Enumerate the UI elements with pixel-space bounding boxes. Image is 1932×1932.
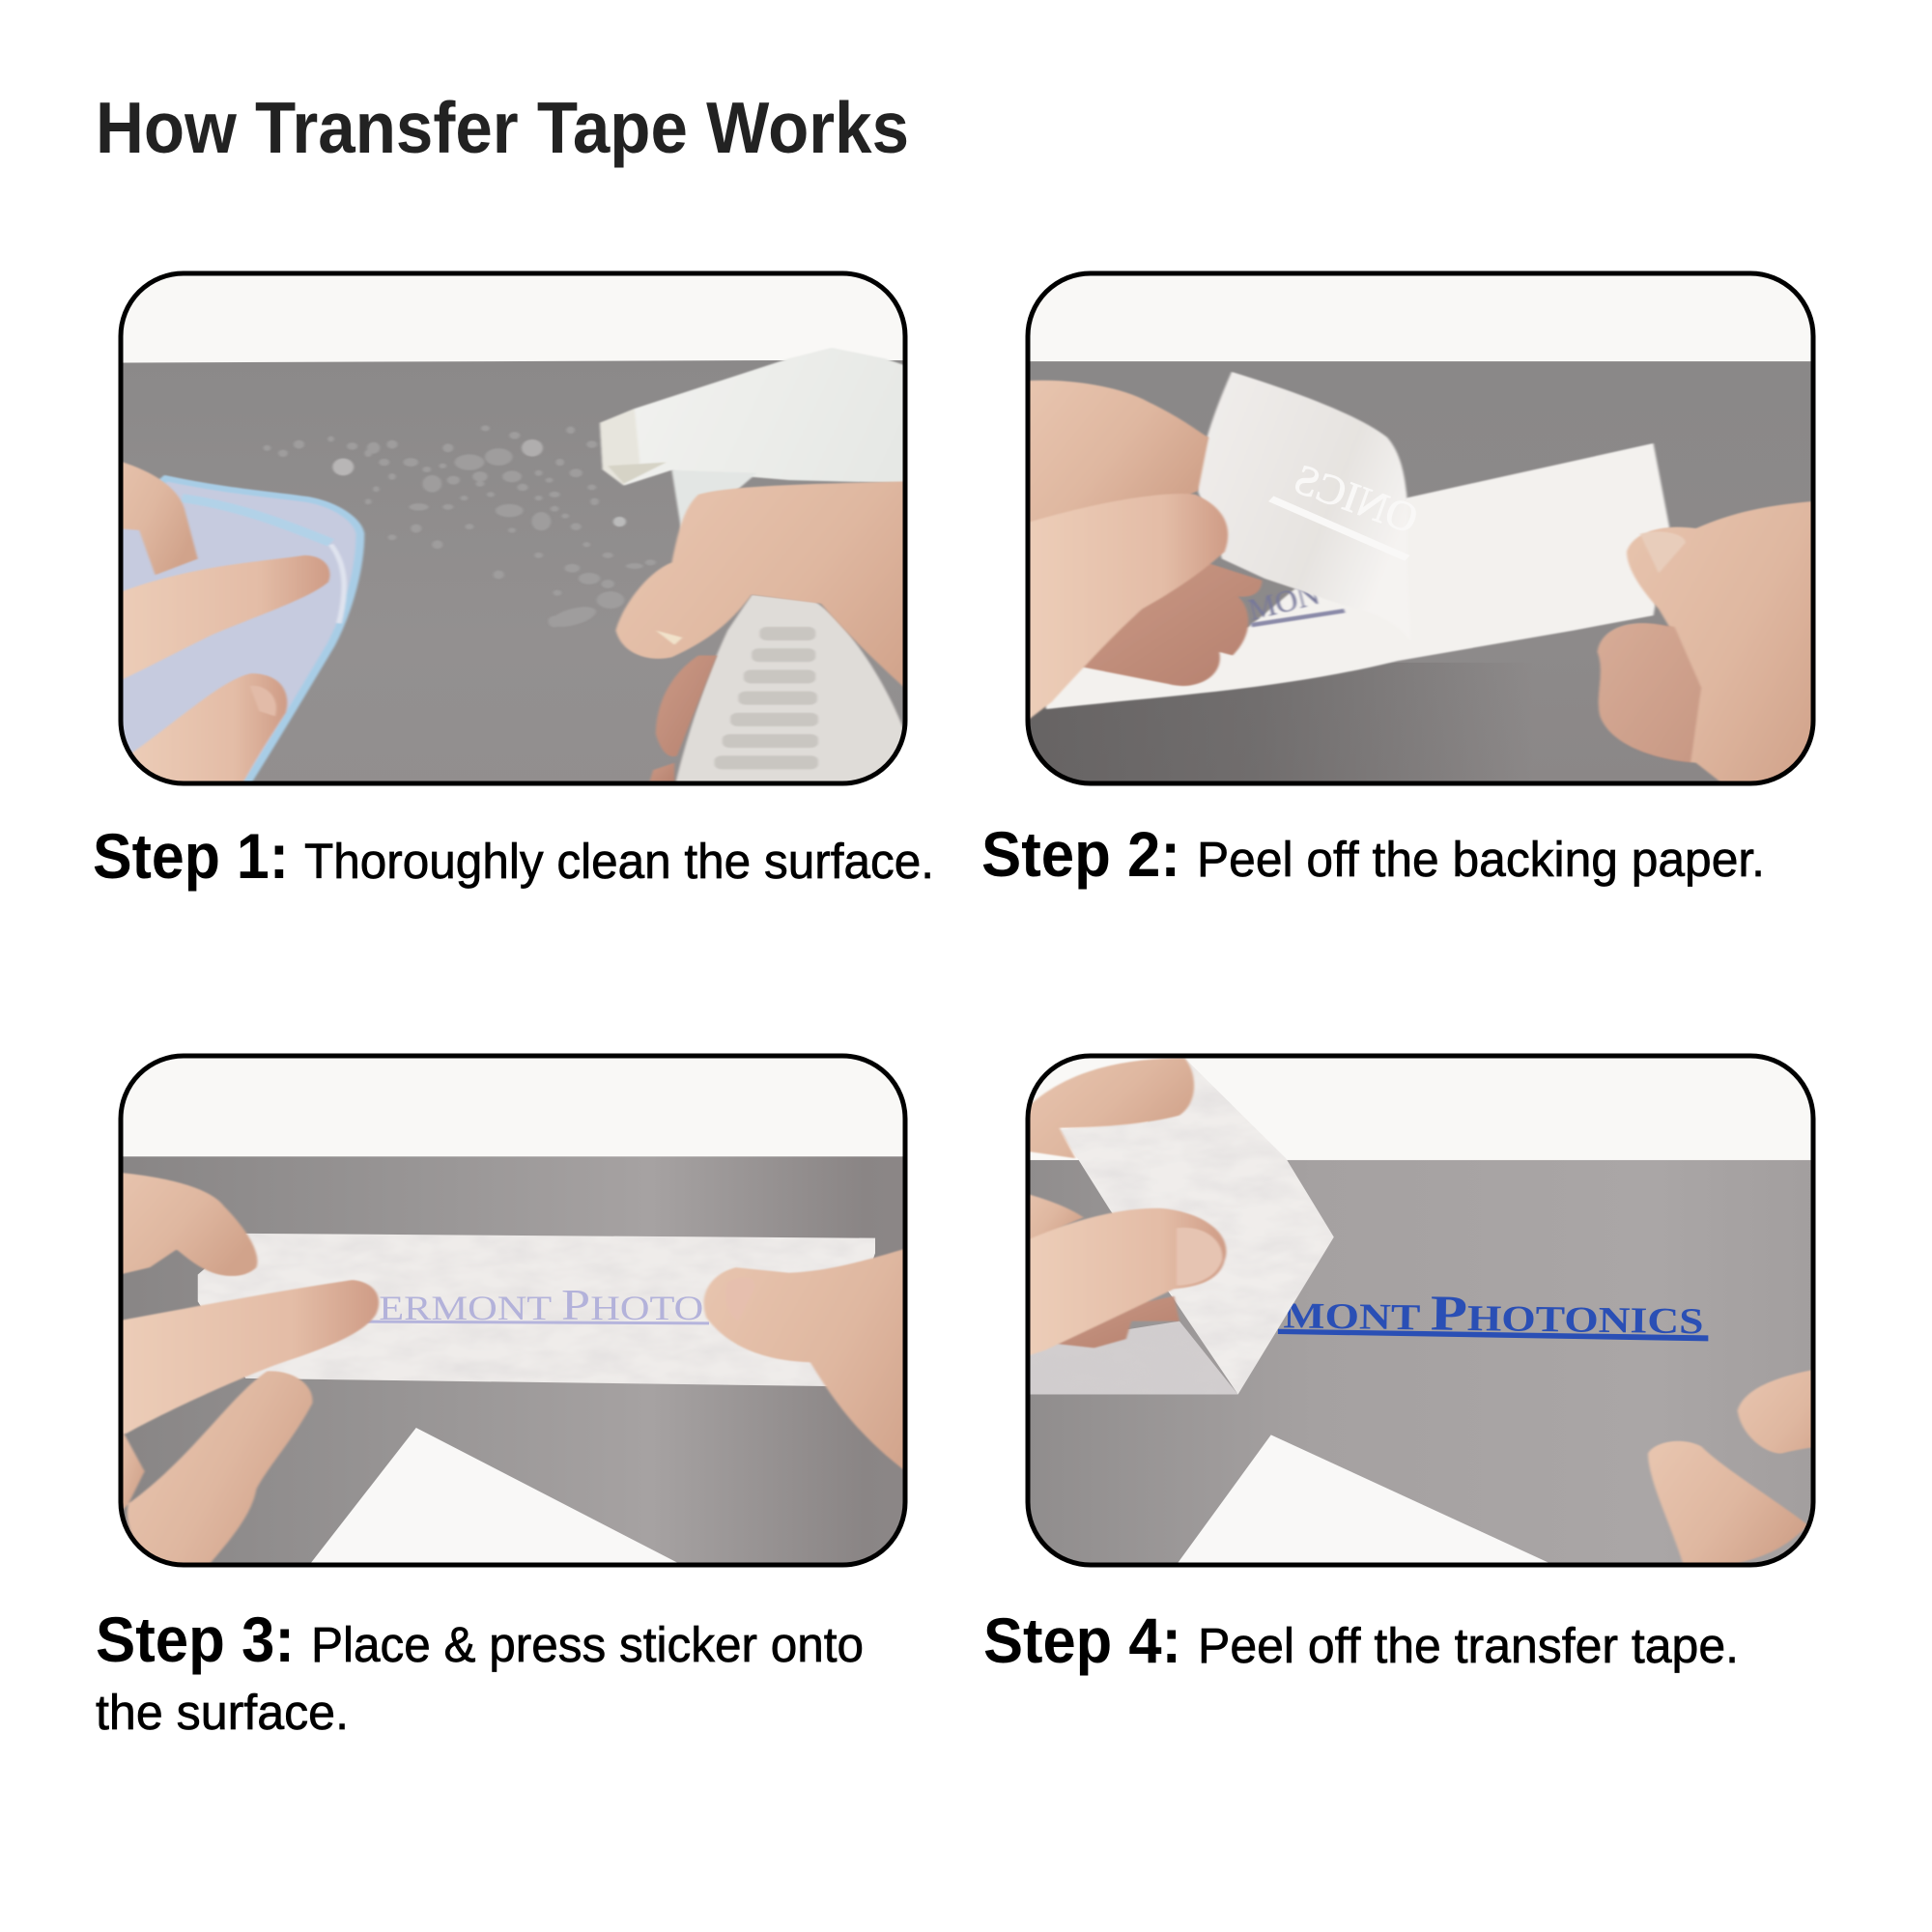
step 1 caption: Thoroughly clean the surface. bbox=[304, 834, 934, 889]
right hand bbox=[1596, 500, 1810, 781]
panel: step 4 photo bbox=[1026, 1053, 1816, 1567]
spray bottle head bbox=[599, 348, 902, 529]
step 3 caption: the surface. bbox=[96, 1685, 349, 1740]
rounded frame bbox=[121, 1056, 905, 1565]
right hand bbox=[614, 481, 902, 781]
title: How Transfer Tape Works bbox=[96, 87, 909, 168]
tape underside bbox=[1031, 1321, 1238, 1395]
white paper triangle bbox=[1174, 1435, 1560, 1568]
backing paper strip bbox=[1036, 443, 1669, 709]
revealed sticker on strip bbox=[1248, 589, 1347, 628]
step 2 caption bbox=[981, 818, 1765, 890]
step 4 caption: Step 4: bbox=[983, 1605, 1181, 1676]
right thumb bbox=[702, 1248, 902, 1470]
left hand bbox=[1014, 1058, 1226, 1360]
mirrored embossed logo bbox=[1269, 466, 1416, 556]
step 3 caption: Place & press sticker onto bbox=[311, 1617, 864, 1672]
step 2 caption: Peel off the backing paper. bbox=[1197, 832, 1765, 887]
step 1 caption: Step 1: bbox=[93, 820, 289, 892]
cloth bbox=[124, 474, 366, 781]
step 2 caption: Step 2: bbox=[981, 818, 1180, 890]
right fingers bbox=[1648, 1362, 1866, 1572]
step 3 caption bbox=[96, 1604, 864, 1740]
spray bottle handle bbox=[674, 595, 909, 788]
step 4 caption bbox=[983, 1605, 1739, 1676]
mirrored embossed logo: ONICS bbox=[1288, 455, 1424, 543]
rounded frame bbox=[1028, 273, 1813, 783]
left hand bbox=[124, 462, 331, 781]
faint sticker text through tape: V bbox=[265, 1292, 289, 1327]
folded tape bbox=[1060, 1058, 1334, 1395]
rounded frame bbox=[1028, 1056, 1813, 1565]
revealed sticker on strip: MON bbox=[1244, 576, 1322, 627]
left hand bbox=[1014, 381, 1262, 730]
left hand bbox=[124, 1173, 381, 1563]
blue sticker logo: MONT PHOTONICS bbox=[1283, 1284, 1704, 1345]
panel: step 1 photo bbox=[118, 270, 908, 786]
panel: step 2 photo bbox=[1026, 270, 1816, 786]
faint sticker text through tape bbox=[367, 1291, 709, 1325]
panel: step 3 photo bbox=[118, 1053, 908, 1567]
rounded frame bbox=[121, 273, 905, 783]
water droplets bbox=[264, 425, 656, 631]
white paper triangle bbox=[307, 1428, 688, 1568]
faint sticker text through tape: ERMONT PHOTO bbox=[379, 1280, 703, 1329]
step 3 caption: Step 3: bbox=[96, 1604, 295, 1675]
step 1 caption bbox=[93, 820, 934, 892]
transfer tape bbox=[198, 1234, 875, 1386]
step 4 caption: Peel off the transfer tape. bbox=[1198, 1618, 1739, 1673]
peeled film bbox=[1197, 371, 1408, 597]
